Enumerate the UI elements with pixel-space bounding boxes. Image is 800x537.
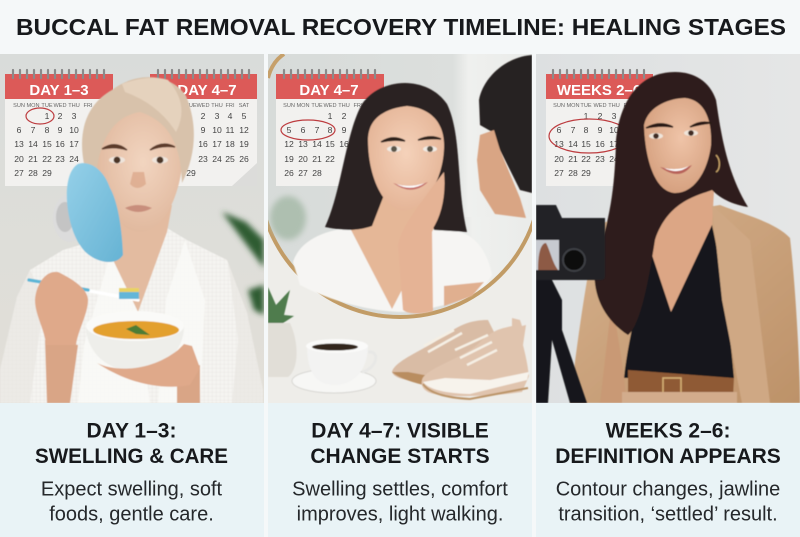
calendar: day 4-7: 5: [242, 111, 247, 121]
heading: weeks 2-6: DEFINITION APPEARS: [555, 445, 781, 468]
calendar: day 4-7: [276, 70, 384, 186]
panel: weeks 2-6 photo: [536, 54, 800, 403]
heading: day 4-7: DAY 4–7: VISIBLE: [311, 420, 489, 442]
calendar: day 1-3: WED: [53, 103, 67, 109]
calendar: day 4-7: 29: [186, 168, 196, 178]
black top: [624, 225, 734, 378]
t-shirt: [293, 225, 492, 312]
hand with brush: [35, 272, 88, 345]
plant: [222, 212, 264, 315]
text: day 1-3: Expect swelling, soft: [41, 478, 223, 500]
heading: day 4-7: CHANGE STARTS: [310, 445, 490, 468]
calendar: day 1-3: 27: [14, 168, 24, 178]
calendar: weeks 2-6: 20: [554, 154, 564, 164]
calendar: day 4-7: FRI: [353, 103, 363, 109]
calendar: day 1-3: 21: [28, 154, 38, 164]
calendar: day 4-7: 16: [198, 139, 208, 149]
robe shading: [0, 262, 263, 403]
calendar: day 4-7: 18: [225, 139, 235, 149]
calendar: weeks 2-6: 10: [609, 125, 619, 135]
toothbrush: [29, 280, 139, 300]
hand on cheek: [398, 172, 444, 314]
title: BUCCAL FAT REMOVAL RECOVERY TIMELINE: HEALING STAGES: [16, 14, 786, 40]
forearm skin: [604, 320, 626, 378]
hair: [594, 72, 748, 335]
calendar: day 1-3: 20: [14, 154, 24, 164]
plant in vase: [268, 287, 297, 377]
calendar: weeks 2-6: 22: [581, 154, 591, 164]
calendar: day 4-7: DAY 4–7: [177, 82, 237, 99]
calendar: day 1-3: 13: [14, 139, 24, 149]
calendar: day 1-3: 10: [69, 125, 79, 135]
calendar: day 4-7: SUN: [283, 103, 295, 109]
calendar: day 4-7: THU: [211, 103, 223, 109]
panel: day 4-7 photo: [268, 54, 532, 403]
calendar: day 4-7: 28: [312, 168, 322, 178]
calendar: day 4-7: 25: [225, 154, 235, 164]
calendar: weeks 2-6: SUN: [553, 103, 565, 109]
face: [644, 98, 711, 193]
calendar: weeks 2-6: 8: [584, 125, 589, 135]
ice pack: [67, 163, 123, 262]
calendar: weeks 2-6: 14: [568, 139, 578, 149]
calendar: day 4-7: WED: [323, 103, 337, 109]
calendar: day 4-7: 10: [212, 125, 222, 135]
calendar: day 4-7: 19: [239, 139, 249, 149]
calendar: weeks 2-6: WEEKS 2–6: [557, 82, 641, 99]
heading: day 1-3: SWELLING & CARE: [35, 445, 228, 468]
text: weeks 2-6: Contour changes, jawline: [556, 478, 780, 500]
text: weeks 2-6: transition, ‘settled’ result.: [558, 504, 778, 526]
calendar: weeks 2-6: MON: [566, 103, 580, 109]
panel: day 4-7 caption: [268, 403, 532, 537]
calendar: day 4-7: 3: [215, 111, 220, 121]
calendar: day 4-7: 21: [312, 154, 322, 164]
calendar: day 1-3: 2: [58, 111, 63, 121]
calendar: day 4-7: 17: [212, 139, 222, 149]
woman in mirror: [293, 55, 532, 314]
calendar: day 4-7: 6: [301, 125, 306, 135]
calendar: day 1-3: 23: [55, 154, 65, 164]
calendar: day 1-3: 9: [58, 125, 63, 135]
calendar: day 4-7: 8: [328, 125, 333, 135]
calendar: weeks 2-6: 1: [584, 111, 589, 121]
calendar: day 1-3: 1: [45, 111, 50, 121]
panel: weeks 2-6 caption: [536, 403, 800, 537]
calendar: day 4-7: DAY 4–7: [299, 82, 359, 99]
calendar: day 4-7: 26: [239, 154, 249, 164]
calendar: weeks 2-6: FRI: [623, 103, 633, 109]
calendar: weeks 2-6: 27: [554, 168, 564, 178]
calendar: day 1-3: THU: [68, 103, 80, 109]
calendar: day 4-7: 7: [315, 125, 320, 135]
calendar: day 4-7: 9: [342, 125, 347, 135]
calendar: day 1-3: TUE: [41, 103, 53, 109]
calendar: day 1-3: 29: [42, 168, 52, 178]
calendar: day 1-3: FRI: [83, 103, 93, 109]
hair: [325, 83, 467, 232]
text: day 4-7: improves, light walking.: [297, 504, 503, 526]
calendar: day 1-3: 16: [55, 139, 65, 149]
calendar: day 4-7: TUE: [311, 103, 323, 109]
face: [368, 106, 444, 211]
calendar: day 4-7: 9: [201, 125, 206, 135]
coffee cup and saucer: [292, 339, 376, 393]
calendar: day 1-3: 17: [69, 139, 79, 149]
calendar: weeks 2-6: 6: [557, 125, 562, 135]
calendar: day 1-3: 7: [31, 125, 36, 135]
forearms: [45, 340, 200, 403]
blazer: [570, 205, 800, 403]
calendar: weeks 2-6: 4: [626, 111, 631, 121]
calendar: day 4-7: WED: [196, 103, 210, 109]
calendar: day 4-7: TUE: [185, 103, 197, 109]
hand under bowl: [97, 344, 200, 387]
calendar: weeks 2-6: [546, 70, 653, 186]
beige sneakers: [392, 318, 529, 399]
calendar: weeks 2-6: 2: [598, 111, 603, 121]
calendar: day 4-7: 15: [325, 139, 335, 149]
heading: day 1-3: DAY 1–3:: [87, 420, 176, 442]
calendar: weeks 2-6: WED: [593, 103, 607, 109]
calendar: day 4-7: 22: [325, 154, 335, 164]
calendar: day 4-7: 16: [339, 139, 349, 149]
calendar: weeks 2-6: 21: [568, 154, 578, 164]
calendar: weeks 2-6: 29: [581, 168, 591, 178]
calendar: day 4-7: 13: [298, 139, 308, 149]
calendar: day 4-7: 2: [342, 111, 347, 121]
text: day 1-3: foods, gentle care.: [49, 504, 214, 526]
calendar: day 4-7: 12: [284, 139, 294, 149]
camera on tripod: [536, 205, 605, 403]
calendar: weeks 2-6: 7: [571, 125, 576, 135]
calendar: day 1-3: 15: [42, 139, 52, 149]
calendar: day 1-3: MON: [26, 103, 40, 109]
calendar: day 4-7: 26: [284, 168, 294, 178]
calendar: day 4-7: 20: [298, 154, 308, 164]
calendar: weeks 2-6: 24: [609, 154, 619, 164]
calendar: day 1-3: 6: [17, 125, 22, 135]
calendar: weeks 2-6: 23: [595, 154, 605, 164]
calendar: day 4-7: 23: [198, 154, 208, 164]
calendar: day 4-7: 1: [328, 111, 333, 121]
woman in blazer: [570, 72, 800, 403]
calendar: day 1-3: 22: [42, 154, 52, 164]
round mirror: [268, 54, 532, 319]
calendar: weeks 2-6: 13: [554, 139, 564, 149]
calendar: day 4-7: 27: [298, 168, 308, 178]
soup bowl: [86, 311, 184, 371]
calendar: day 4-7: SAT: [239, 103, 250, 109]
calendar: day 1-3: 3: [72, 111, 77, 121]
calendar: day 4-7: FRI: [225, 103, 235, 109]
woman with ice pack: [0, 77, 263, 403]
calendar: weeks 2-6: TUE: [580, 103, 592, 109]
calendar: day 4-7: THU: [338, 103, 350, 109]
calendar: day 4-7: 11: [226, 125, 235, 135]
calendar: day 4-7: 5: [287, 125, 292, 135]
calendar: day 4-7: 14: [312, 139, 322, 149]
calendar: day 1-3: 14: [28, 139, 38, 149]
reflection of back of head: [479, 55, 532, 193]
panel: day 1-3 caption: [0, 403, 264, 537]
calendar: day 1-3: 8: [45, 125, 50, 135]
calendar: day 4-7: 12: [239, 125, 249, 135]
calendar: weeks 2-6: 9: [598, 125, 603, 135]
calendar: day 1-3: SUN: [13, 103, 25, 109]
leather belt: [622, 370, 737, 403]
calendar: weeks 2-6: 16: [595, 139, 605, 149]
calendar: weeks 2-6: 17: [609, 139, 619, 149]
calendar: day 4-7: 24: [212, 154, 222, 164]
calendar: weeks 2-6: 3: [612, 111, 617, 121]
chest skin: [652, 190, 714, 312]
calendar: weeks 2-6: 28: [568, 168, 578, 178]
blurred foliage: [270, 196, 306, 240]
neck and chest: [350, 190, 434, 309]
calendar: day 4-7: 4: [228, 111, 233, 121]
calendar: day 4-7: 2: [201, 111, 206, 121]
calendar: day 1-3: 28: [28, 168, 38, 178]
neck: [108, 205, 172, 312]
head: [96, 112, 182, 214]
calendar: day 4-7: [150, 70, 257, 186]
calendar: day 1-3: 24: [69, 154, 79, 164]
towel turban: [82, 77, 194, 183]
ice pack cap: [53, 194, 87, 242]
bathrobe: [30, 228, 239, 403]
heading: weeks 2-6: WEEKS 2–6:: [606, 420, 730, 442]
calendar: day 4-7: MON: [296, 103, 310, 109]
calendar: day 4-7: 19: [284, 154, 294, 164]
panel: day 1-3 photo: [0, 54, 264, 403]
calendar: weeks 2-6: THU: [608, 103, 620, 109]
text: day 4-7: Swelling settles, comfort: [292, 478, 508, 500]
calendar: day 1-3: [5, 70, 113, 186]
right lapel: [712, 205, 770, 403]
calendar: weeks 2-6: 15: [581, 139, 591, 149]
calendar: day 1-3: DAY 1–3: [29, 82, 89, 99]
